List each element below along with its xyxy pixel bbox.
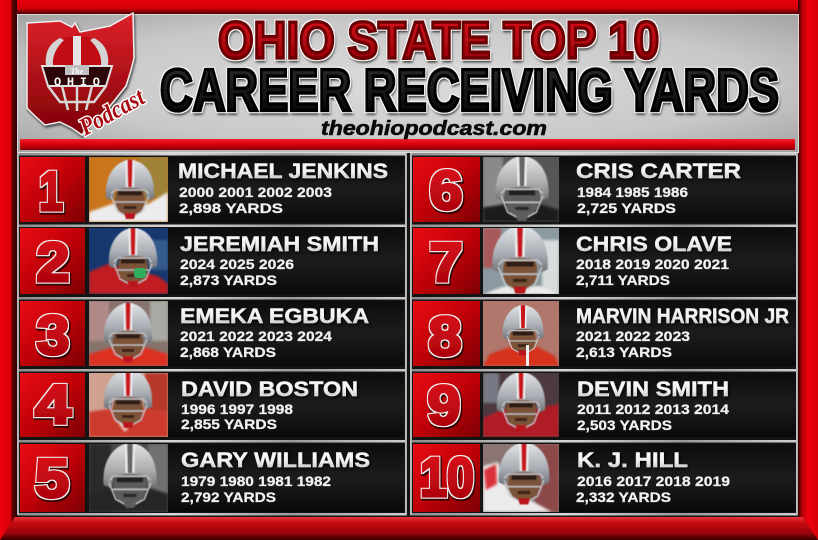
photo: K. J. Hill	[483, 444, 559, 512]
photo: Jeremiah Smith	[89, 228, 168, 294]
player name: MICHAEL JENKINS	[178, 160, 388, 183]
rank box 1	[20, 157, 85, 222]
seasons: 2011 2012 2013 2014	[577, 401, 729, 417]
yards: 2,332 YARDS	[576, 489, 671, 505]
player name: CRIS CARTER	[576, 160, 741, 183]
rank number: 1	[39, 160, 63, 222]
stat panel	[559, 444, 796, 512]
title line 1: OHIO STATE TOP 10	[218, 12, 659, 70]
website url: theohiopodcast.com	[321, 118, 547, 140]
stat panel	[168, 228, 404, 294]
player name: JEREMIAH SMITH	[180, 233, 379, 256]
photo: Gary Williams	[89, 444, 168, 512]
seasons: 1979 1980 1981 1982	[181, 473, 331, 489]
row 5: Gary Williams	[20, 443, 404, 512]
rank number: 4	[35, 373, 71, 435]
rank number: 6	[430, 159, 462, 221]
rank number: 10	[420, 446, 474, 508]
stat panel	[168, 301, 404, 366]
rank box 7	[413, 228, 480, 294]
stat panel	[559, 157, 796, 222]
yards: 2,725 YARDS	[577, 200, 676, 216]
rank number: 7	[430, 231, 462, 293]
player name: DAVID BOSTON	[181, 378, 358, 401]
stat panel	[168, 373, 404, 437]
red divider bar	[20, 139, 795, 150]
logo text: OHIO: OHIO	[54, 76, 100, 90]
rank box 6	[413, 157, 480, 222]
rank box 4	[20, 373, 85, 437]
player name: CHRIS OLAVE	[576, 233, 732, 256]
photo: Devin Smith	[483, 373, 559, 437]
row 10: K. J. Hill	[413, 443, 796, 512]
row 1: Michael Jenkins	[20, 157, 404, 222]
photo: Cris Carter	[483, 157, 559, 222]
yards: 2,792 YARDS	[181, 489, 276, 505]
rank box 5	[20, 444, 85, 512]
photo: Emeka Egbuka	[89, 301, 168, 366]
seasons: 2024 2025 2026	[180, 256, 294, 272]
yards: 2,613 YARDS	[576, 344, 672, 360]
rank number: 8	[428, 305, 462, 367]
logo text: Podcast: Podcast	[74, 83, 150, 142]
photo: Chris Olave	[483, 228, 559, 294]
logo text: The: The	[71, 67, 84, 76]
seasons: 1996 1997 1998	[181, 401, 293, 417]
yards: 2,868 YARDS	[180, 344, 276, 360]
seasons: 2000 2001 2002 2003	[179, 184, 332, 200]
yards: 2,898 YARDS	[179, 200, 283, 216]
row 7: Chris Olave	[413, 226, 796, 294]
row 3: Emeka Egbuka	[20, 301, 404, 366]
logo: The Ohio Podcast	[27, 13, 150, 142]
stat panel	[168, 157, 404, 222]
photo: David Boston	[89, 373, 168, 437]
silver row frames	[17, 153, 798, 516]
seasons: 2021 2022 2023	[576, 328, 690, 344]
seasons: 2018 2019 2020 2021	[576, 256, 729, 272]
photo: Michael Jenkins	[89, 157, 168, 222]
yards: 2,711 YARDS	[576, 272, 670, 288]
stat panel	[559, 228, 796, 294]
rank box 3	[20, 301, 85, 366]
header panel	[18, 14, 798, 152]
stat panel	[559, 373, 796, 437]
icon: Ohio state outline	[27, 13, 134, 135]
player name: EMEKA EGBUKA	[180, 305, 369, 328]
rank number: 3	[36, 304, 70, 366]
rank box 2	[20, 228, 85, 294]
rank box 10	[413, 444, 480, 512]
rank box 9	[413, 373, 480, 437]
player name: GARY WILLIAMS	[181, 449, 370, 472]
yards: 2,503 YARDS	[577, 417, 672, 433]
seasons: 2016 2017 2018 2019	[577, 473, 730, 489]
rank number: 2	[36, 231, 70, 293]
stat panel	[168, 444, 404, 512]
row 8: Marvin Harrison Jr	[413, 301, 796, 367]
seasons: 1984 1985 1986	[577, 184, 688, 200]
row 4: David Boston	[20, 369, 404, 437]
rank number: 5	[35, 447, 69, 509]
photo: Marvin Harrison Jr	[483, 301, 559, 366]
rank box 8	[413, 301, 480, 366]
player name: MARVIN HARRISON JR	[576, 305, 789, 328]
rank number: 9	[428, 374, 460, 436]
seasons: 2021 2022 2023 2024	[180, 328, 332, 344]
player name: DEVIN SMITH	[577, 378, 729, 401]
icon: helmet	[42, 36, 112, 111]
row 6: Cris Carter	[413, 156, 796, 222]
yards: 2,873 YARDS	[180, 272, 277, 288]
stat panel	[559, 301, 796, 366]
yards: 2,855 YARDS	[181, 416, 277, 432]
row 9: Devin Smith	[413, 372, 796, 437]
player name: K. J. HILL	[577, 449, 688, 472]
row 2: Jeremiah Smith	[20, 228, 404, 294]
